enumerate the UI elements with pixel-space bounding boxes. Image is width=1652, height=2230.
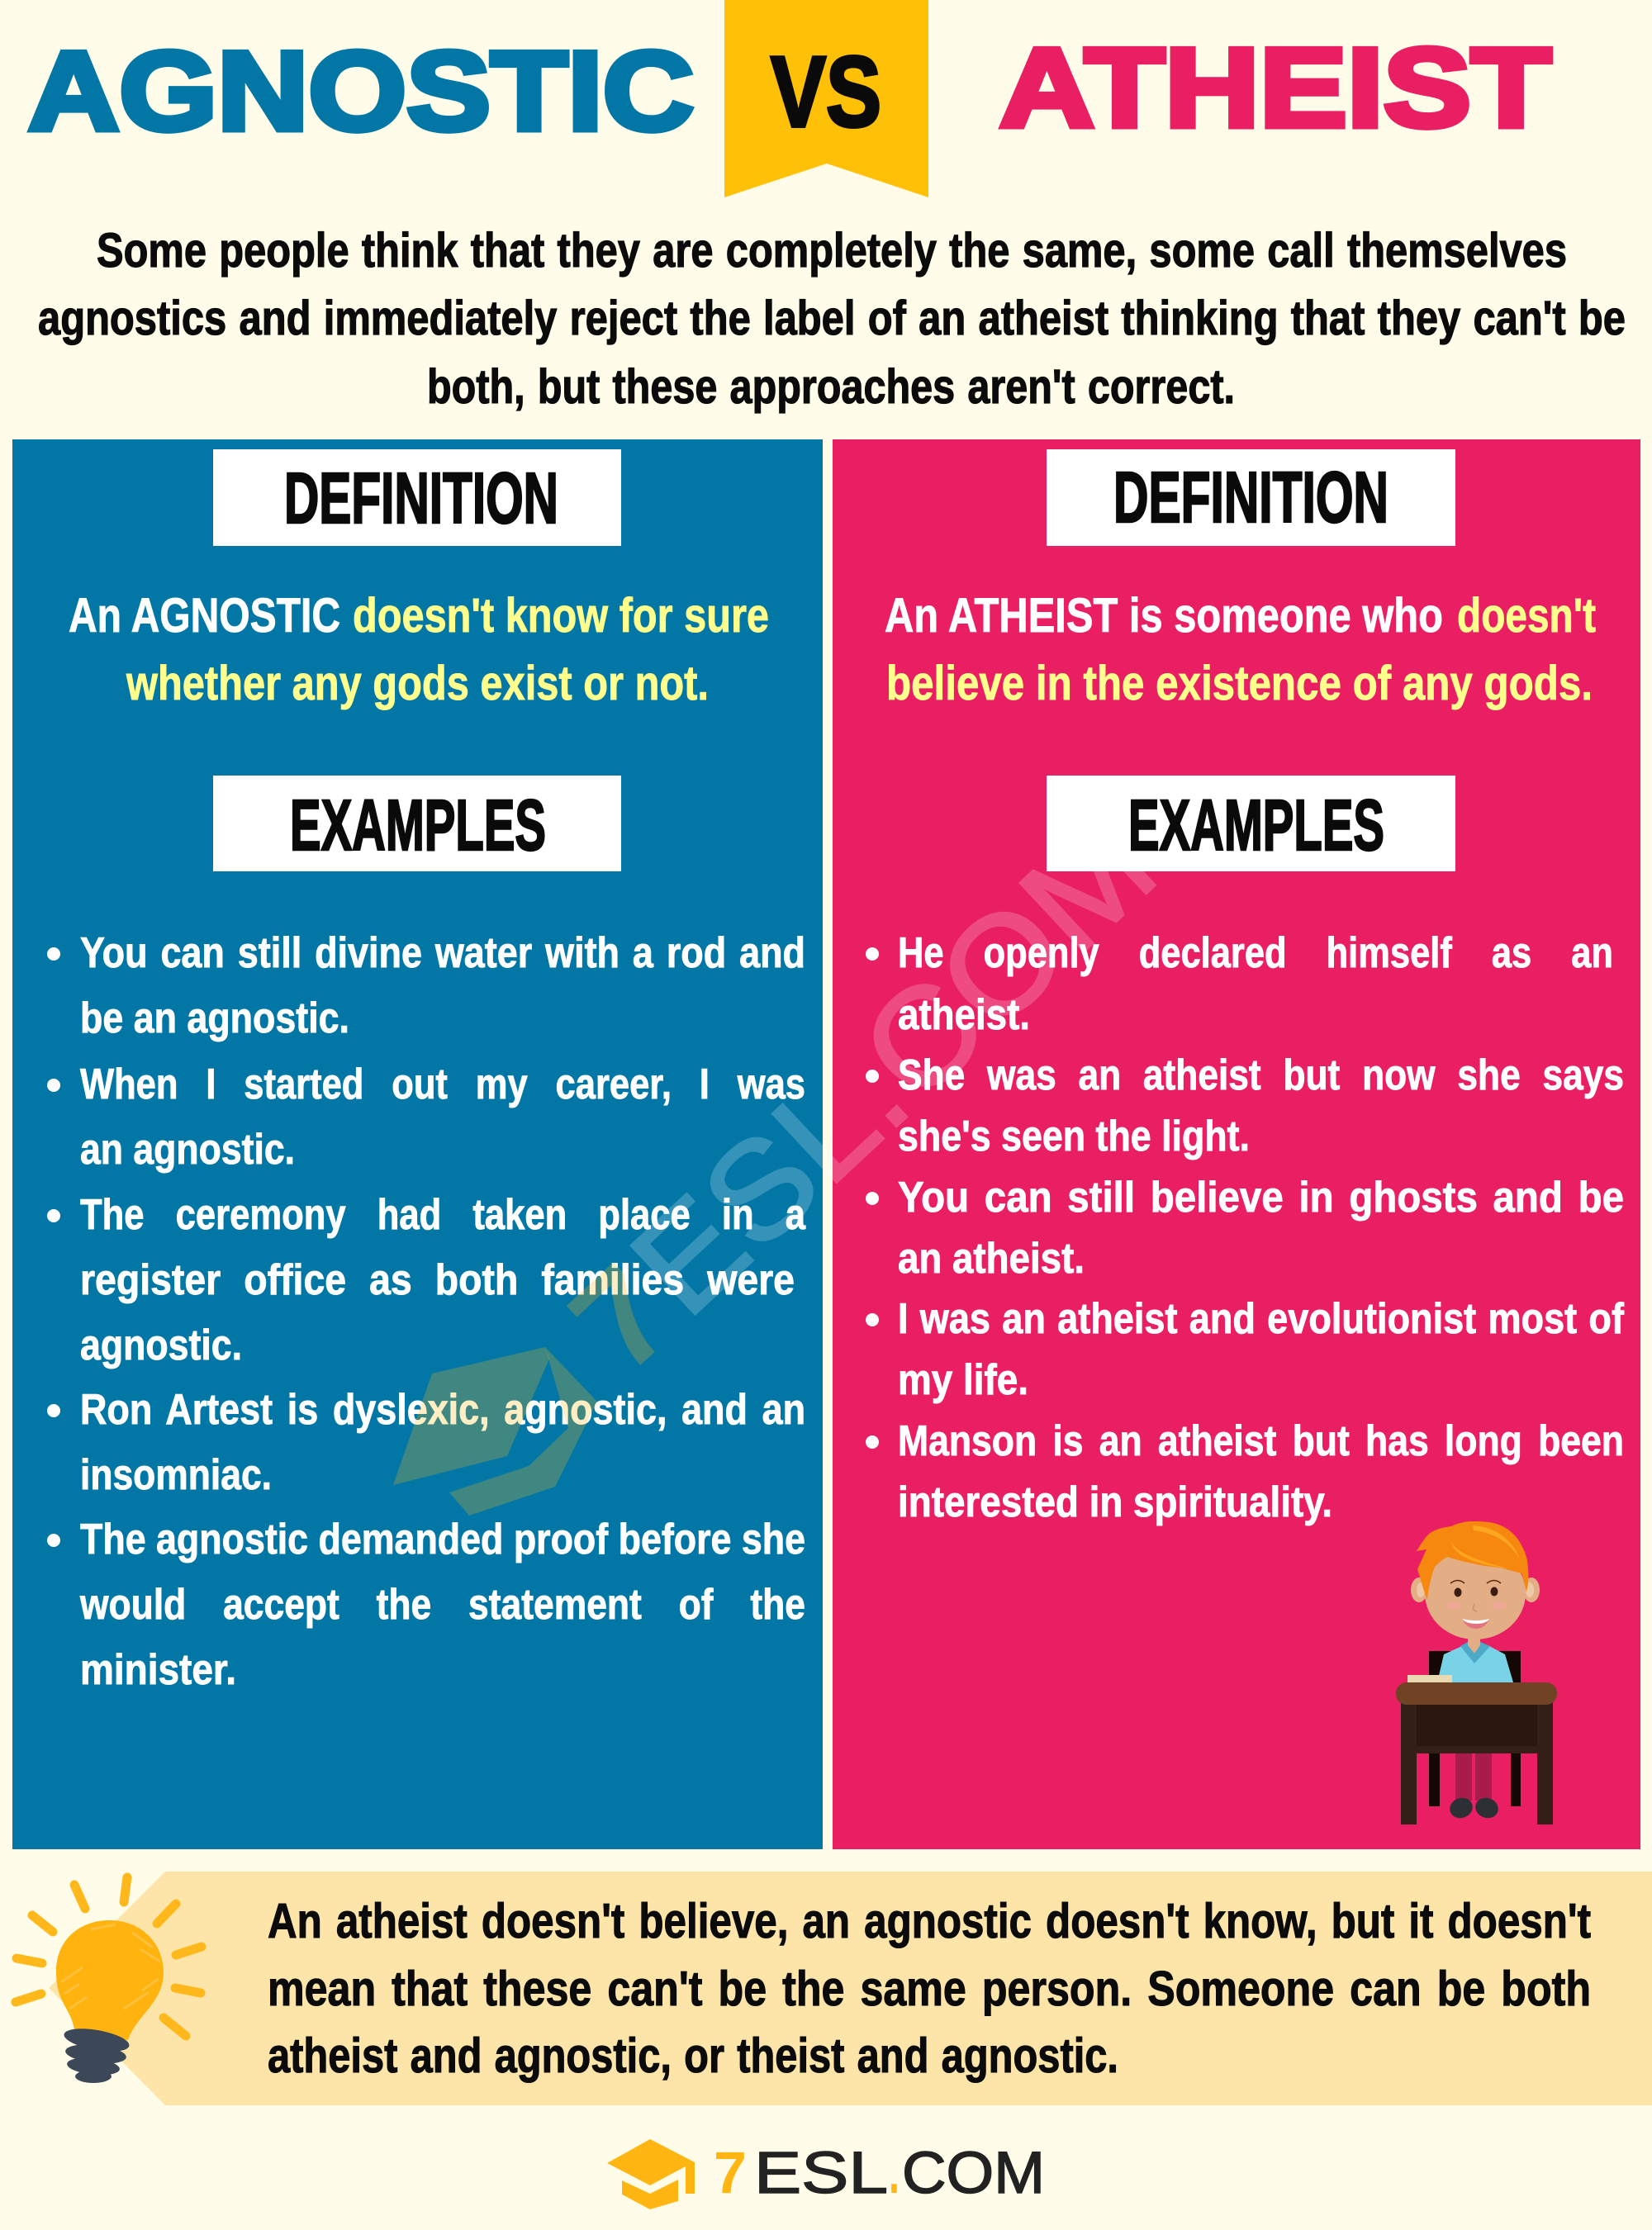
watermark: 7esl logo (393, 787, 1184, 1516)
list: atheist examples: my life. (898, 1356, 1028, 1404)
list: atheist examples: interested in spirituality. (898, 1478, 1332, 1526)
list: agnostic examples: be an agnostic. (80, 994, 349, 1042)
banner: vs ribbon: VS (771, 36, 881, 148)
list: agnostic examples: When I started out my career, I was (80, 1060, 805, 1108)
heading: atheist definition: DEFINITION (1113, 458, 1389, 538)
heading: atheist examples (1047, 776, 1455, 871)
logo: 7esl.com: ESL (754, 2141, 888, 2206)
text: atheist definition (885, 589, 1596, 710)
list: agnostic examples: insomniac. (80, 1451, 272, 1499)
logo: 7esl.com: . (889, 2141, 900, 2206)
list: agnostic examples: an agnostic. (80, 1126, 295, 1174)
text: agnostic definition (69, 589, 769, 710)
logo: 7esl.com (607, 2139, 1045, 2209)
list: agnostic examples: agnostic. (80, 1321, 242, 1369)
watermark: 7esl logo: 7 (542, 1236, 701, 1400)
logo: 7esl.com: 7 (714, 2141, 747, 2206)
icon: light bulb (16, 1877, 202, 2083)
icon: child at desk (1396, 1521, 1557, 1824)
list: agnostic examples: would accept the statement of the (79, 1581, 805, 1629)
heading: atheist definition (1047, 449, 1455, 546)
heading: agnostic examples: EXAMPLES (290, 785, 546, 866)
list: atheist examples (866, 929, 1625, 1526)
list: agnostic examples: You can still divine water with a rod and (80, 929, 805, 977)
panel: agnostic (12, 439, 823, 1849)
list: agnostic examples: minister. (80, 1646, 236, 1694)
watermark: 7esl logo: ESL.COM (603, 787, 1184, 1343)
text: agnostic definition: doesn't know for sure (353, 589, 769, 643)
text: atheist definition: doesn't (1457, 589, 1596, 643)
logo: 7esl.com: COM (902, 2141, 1045, 2206)
list: agnostic examples: Ron Artest is dyslexic, agnostic, and an (80, 1386, 805, 1434)
title: atheist: ATHEIST (999, 25, 1551, 150)
list: atheist examples: an atheist. (898, 1235, 1085, 1283)
heading: atheist examples: EXAMPLES (1128, 785, 1384, 866)
callout: summary band (16, 1872, 1652, 2105)
list: agnostic examples (47, 929, 806, 1694)
heading: agnostic definition (213, 449, 621, 546)
panel: atheist (833, 439, 1640, 1849)
list: agnostic examples: The ceremony had taken place in a (80, 1191, 806, 1239)
list: agnostic examples: The agnostic demanded proof before she (80, 1516, 805, 1563)
list: atheist examples: atheist. (898, 991, 1030, 1039)
heading: agnostic examples (213, 776, 621, 871)
banner: vs ribbon (724, 0, 928, 197)
text: summary (268, 1894, 1591, 2083)
text: agnostic definition: An AGNOSTIC (69, 589, 340, 643)
text: atheist definition: An ATHEIST is someone who (885, 589, 1443, 643)
list: agnostic examples: register office as both families were (80, 1256, 795, 1304)
text: summary: atheist and agnostic, or theist and agnostic. (268, 2028, 1118, 2083)
title: agnostic: AGNOSTIC (28, 28, 694, 154)
heading: agnostic definition: DEFINITION (284, 458, 558, 539)
intro text block: both, but these approaches aren't correct. (427, 360, 1235, 414)
text: agnostic definition: whether any gods exist or not. (126, 657, 709, 710)
list: atheist examples: she's seen the light. (898, 1113, 1250, 1160)
intro text block (38, 224, 1626, 414)
